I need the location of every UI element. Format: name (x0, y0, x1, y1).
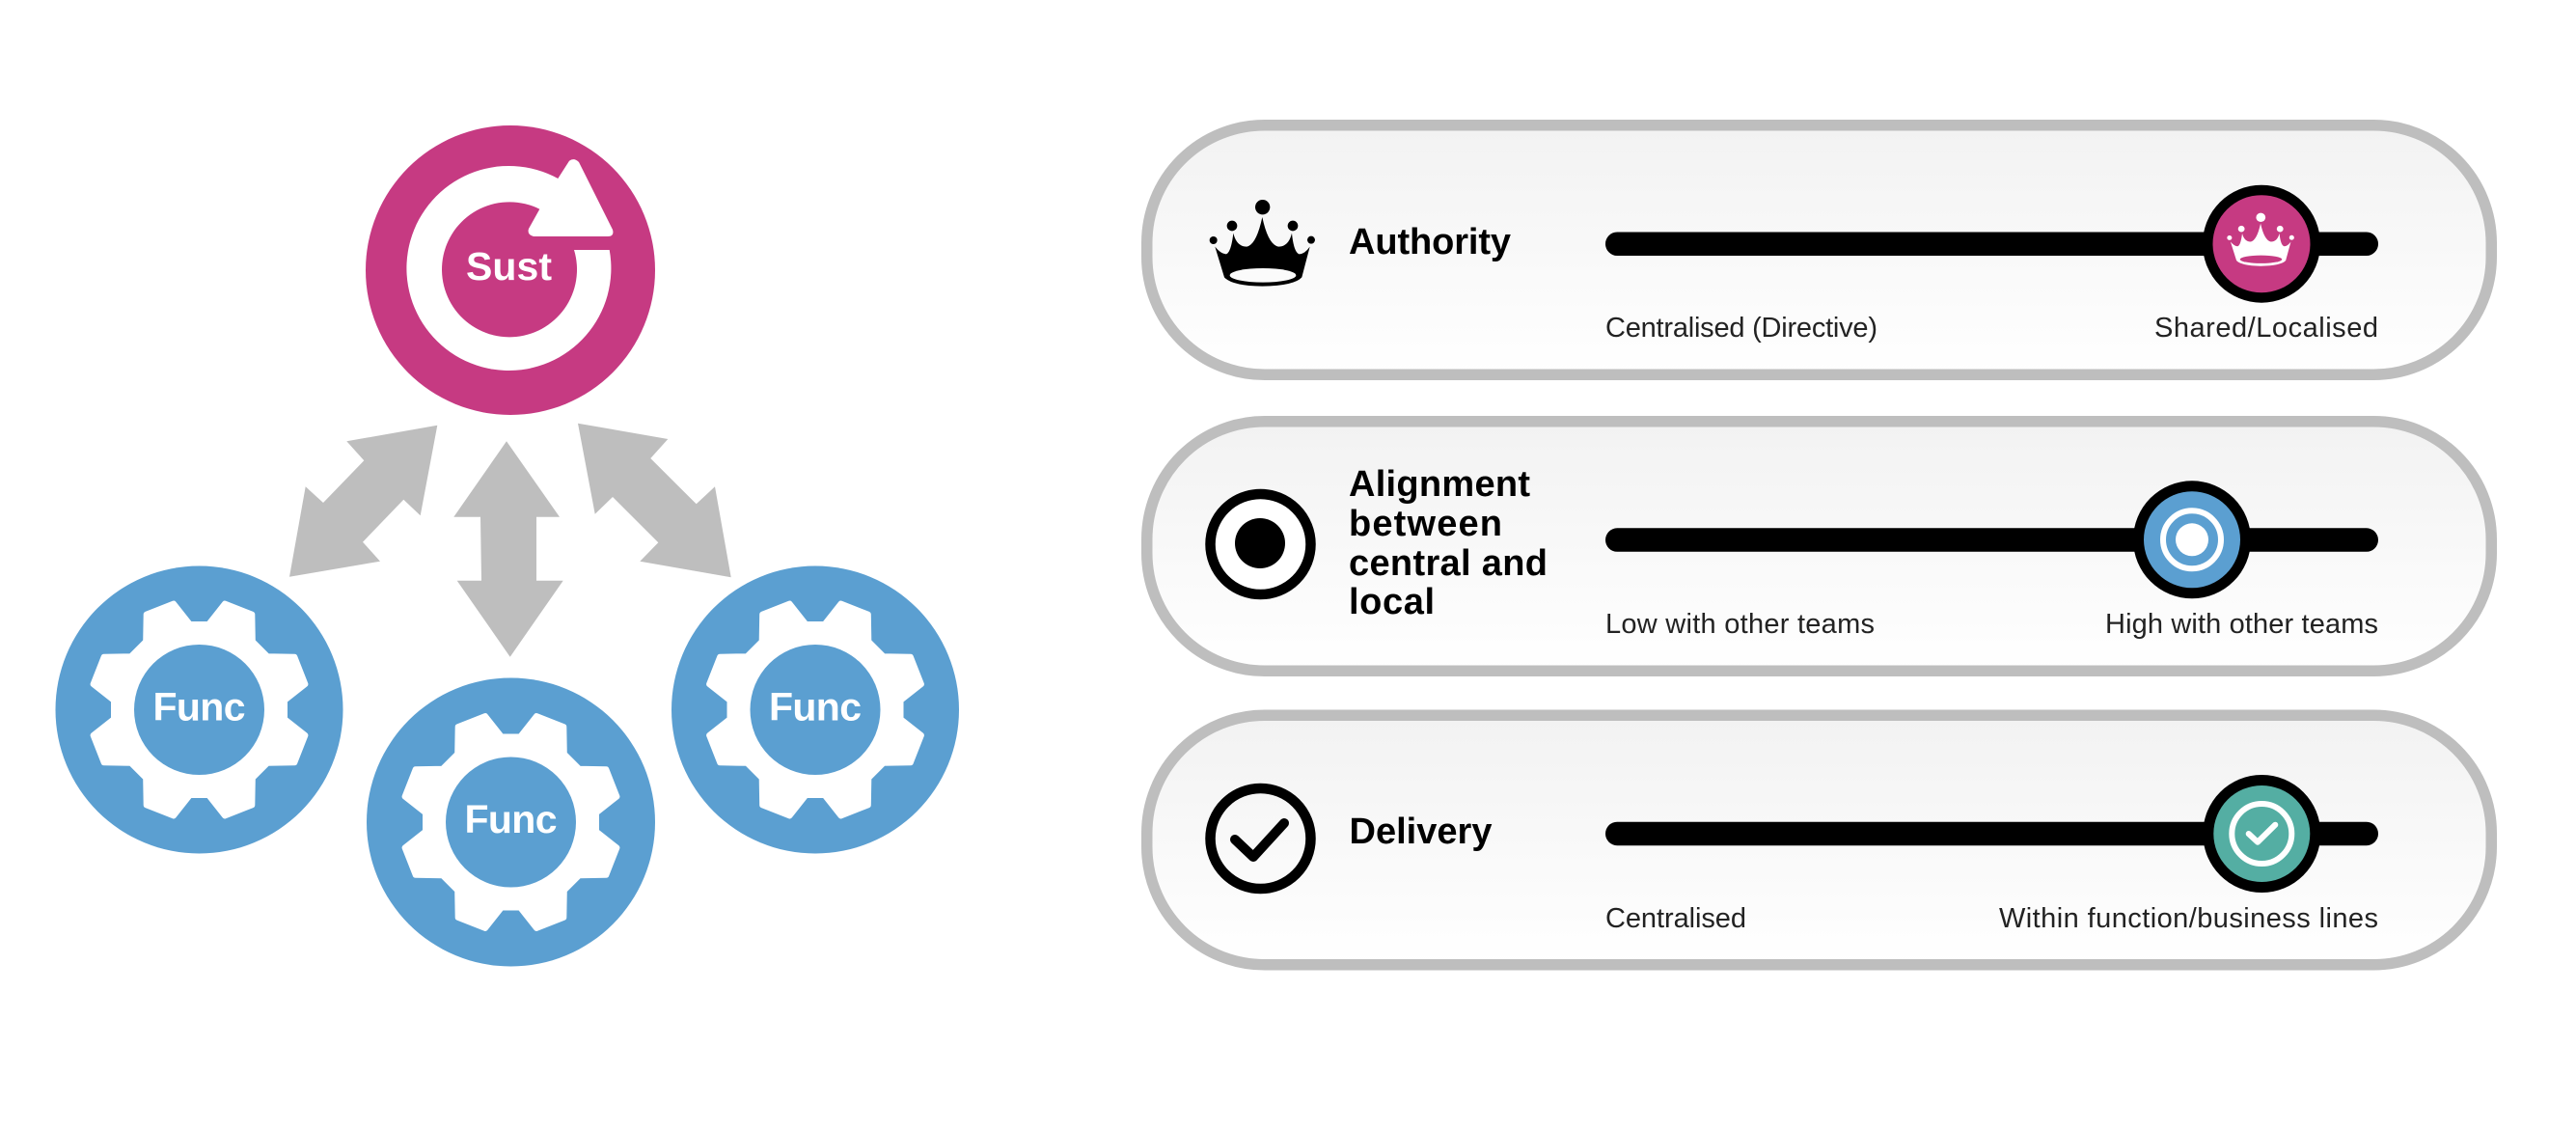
panel: Delivery (1147, 715, 2491, 965)
node: right Func gear: Func (769, 685, 862, 730)
slider track (1605, 232, 2378, 256)
heading: Alignment between central and local: Alignment (1349, 464, 1530, 505)
slider track (1605, 822, 2378, 845)
icon: crown (1210, 200, 1315, 287)
node: centre Func gear: Func (465, 797, 558, 841)
diagram: hub and spoke operating model (56, 125, 959, 967)
icon: check circle (1210, 788, 1310, 889)
arrow: Sust to right Func (578, 424, 731, 577)
node: centre Func gear (367, 677, 655, 967)
slider knob: target (2133, 481, 2251, 598)
slider track (1605, 528, 2378, 552)
icon: target (1210, 494, 1310, 594)
label: Sust: Sust (466, 244, 552, 289)
scale label: right: Within function/business lines (1999, 903, 2378, 934)
arrow: Sust to centre Func (453, 441, 563, 657)
scale label: right: Shared/Localised (2154, 313, 2378, 344)
heading: Authority: Authority (1349, 222, 1511, 262)
scale label: left: Centralised (1605, 903, 1746, 934)
icon: circular arrow (406, 159, 613, 371)
node: left Func gear: Func (152, 685, 245, 730)
heading: Alignment between central and local: between (1349, 504, 1502, 544)
panel: Authority (1147, 125, 2491, 374)
heading: Alignment between central and local: central and (1349, 543, 1548, 584)
slider knob: crown (2203, 185, 2320, 303)
panel: Alignment between central and local (1147, 422, 2491, 671)
node: Sust circle (366, 125, 655, 415)
arrow: Sust to left Func (289, 426, 437, 577)
heading: Alignment between central and local: local (1349, 582, 1435, 622)
heading: Delivery: Delivery (1349, 812, 1492, 852)
scale label: right: High with other teams (2105, 609, 2378, 640)
slider knob: check (2203, 775, 2320, 893)
node: right Func gear (671, 565, 959, 853)
heading: Alignment between central and local (1349, 464, 1548, 622)
node: left Func gear (56, 565, 343, 853)
scale label: left: Low with other teams (1605, 609, 1875, 640)
scale label: left: Centralised (Directive) (1605, 313, 1877, 344)
